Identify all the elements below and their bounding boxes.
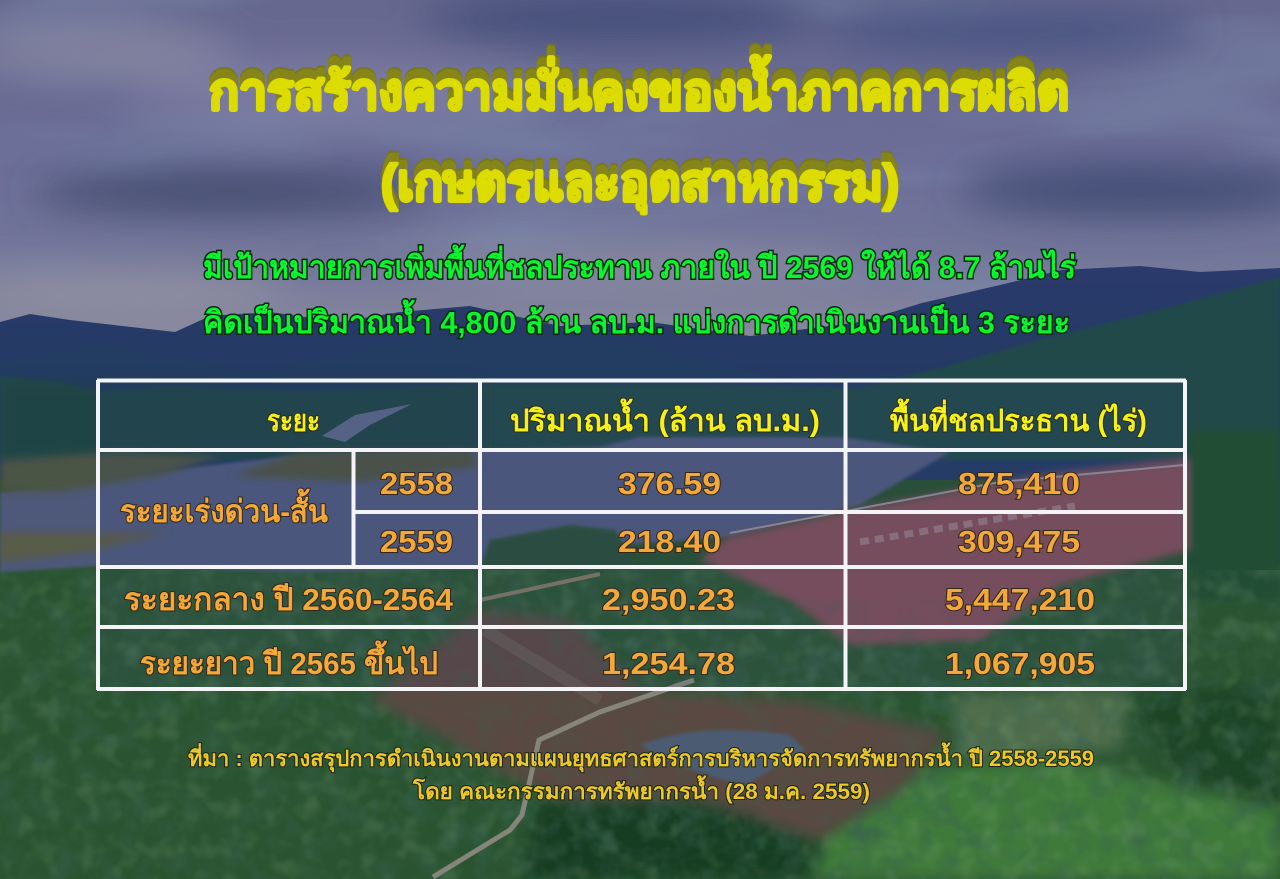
upper forest texture	[0, 380, 480, 460]
table header: ระยะ	[267, 405, 320, 438]
row: ระยะยาว: 1,254.78	[602, 646, 735, 681]
source note: โดย คณะกรรมการทรัพยากรน้ำ (28 ม.ค. 2559)	[412, 775, 870, 804]
right forest	[1126, 680, 1280, 810]
subtitle text: คิดเป็นปริมาณน้ำ 4,800 ล้าน ลบ.ม. แบ่งการดำเนินงานเป็น 3 ระยะ	[203, 299, 1070, 340]
subtitle text: มีเป้าหมายการเพิ่มพื้นที่ชลประทาน ภายใน ปี 2569 ให้ได้ 8.7 ล้านไร่	[203, 244, 1076, 285]
source note	[188, 742, 1094, 804]
dam crest	[730, 465, 1184, 533]
row: ระยะยาว	[140, 640, 1095, 681]
row: ระยะเร่งด่วน-สั้น: 2559	[380, 524, 453, 559]
row: ระยะยาว: 1,067,905	[945, 646, 1095, 681]
row: ระยะกลาง: 5,447,210	[945, 582, 1095, 617]
trees on promontory	[480, 525, 640, 570]
spillway and lower embankment	[370, 610, 947, 840]
title	[209, 55, 1069, 214]
title line 1: การสร้างความมั่นคงของน้ำภาคการผลิต	[209, 55, 1069, 120]
side channel	[322, 404, 412, 442]
table header: พื้นที่ชลประธาน (ไร่)	[890, 398, 1147, 438]
table	[97, 380, 1186, 690]
mid hills	[0, 330, 1280, 480]
title line 2: (เกษตรและอุตสาหกรรม)	[381, 155, 899, 214]
dam lettering	[860, 506, 1075, 542]
subtitle text	[203, 244, 1076, 340]
lower forest base	[0, 565, 1280, 879]
pond	[640, 730, 805, 785]
source note: ที่มา : ตารางสรุปการดำเนินงานตามแผนยุทธศาสตร์การบริหารจัดการทรัพยากรน้ำ ปี 2558-2559	[188, 742, 1094, 773]
dam face	[700, 458, 1190, 645]
row: ระยะเร่งด่วน-สั้น: 376.59	[618, 466, 721, 501]
clouds	[0, 0, 1280, 304]
row: ระยะยาว: ระยะยาว ปี 2565 ขึ้นไป	[140, 640, 438, 681]
lake shores	[0, 452, 220, 492]
row: ระยะเร่งด่วน-สั้น: ระยะเร่งด่วน-สั้น	[120, 488, 328, 529]
row: ระยะเร่งด่วน-สั้น: 309,475	[958, 524, 1080, 559]
reservoir water	[0, 437, 950, 572]
dark trees lower centre	[520, 795, 815, 879]
bright field	[816, 760, 1280, 879]
row: ระยะเร่งด่วน-สั้น: 875,410	[958, 466, 1080, 501]
row: ระยะกลาง: ระยะกลาง ปี 2560-2564	[124, 582, 454, 617]
sky	[0, 0, 1280, 340]
row: ระยะเร่งด่วน-สั้น: 2558	[380, 466, 453, 501]
green hill band	[0, 277, 1280, 590]
road	[433, 680, 694, 877]
row: ระยะเร่งด่วน-สั้น	[120, 466, 1080, 559]
row: ระยะเร่งด่วน-สั้น: 218.40	[618, 524, 721, 559]
table header	[267, 398, 1147, 438]
far mountains	[0, 266, 1280, 470]
table grid	[97, 380, 1186, 690]
row: ระยะกลาง	[124, 582, 1095, 617]
table tint	[97, 380, 1186, 689]
table header: ปริมาณน้ำ (ล้าน ลบ.ม.)	[510, 398, 820, 438]
forest texture	[0, 570, 1280, 879]
row: ระยะกลาง: 2,950.23	[602, 582, 735, 617]
